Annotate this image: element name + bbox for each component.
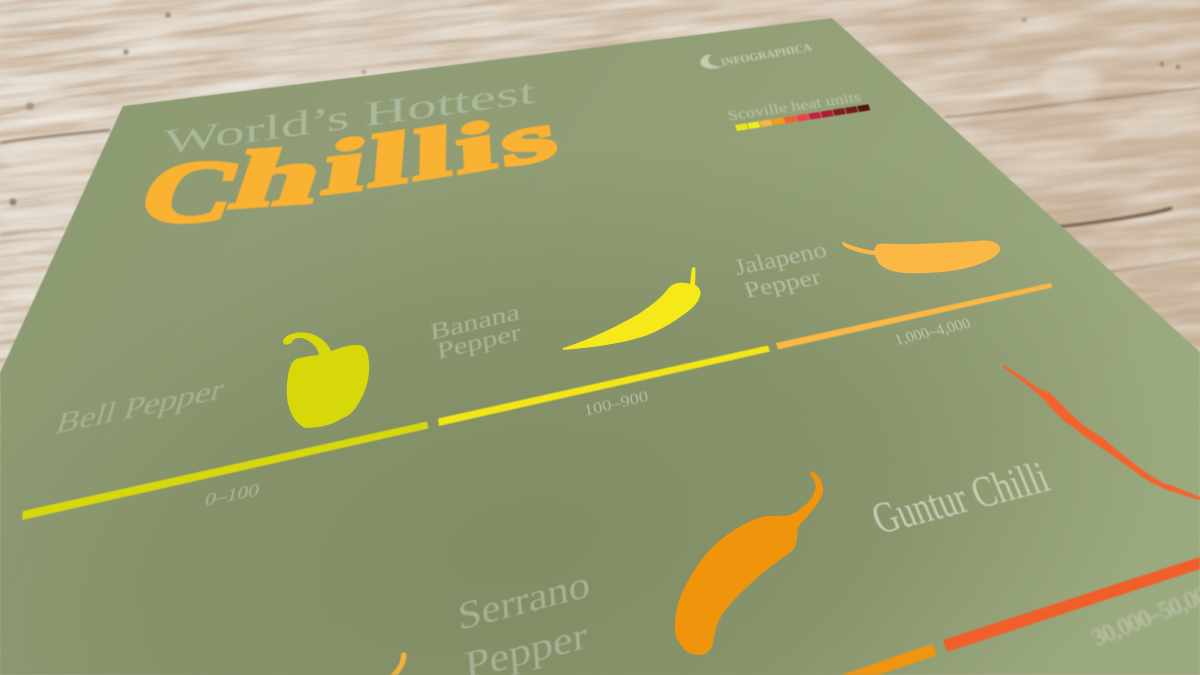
label: Jalapeno Pepper — [731, 237, 830, 303]
label: Banana Pepper: Banana — [429, 298, 521, 345]
label: Jalapeno Pepper: Pepper — [741, 264, 825, 303]
legend: Scoville heat units — [726, 89, 870, 131]
range label: 0–100: 0–100 — [203, 480, 261, 510]
title line: Chillis: s — [498, 93, 563, 183]
label: Banana Pepper: Pepper — [435, 318, 522, 364]
title line: Chillis: i — [454, 105, 501, 190]
label: Serrano Pepper — [460, 580, 589, 675]
item: Bell Pepper — [22, 332, 428, 520]
icon: serrano pepper — [675, 471, 823, 655]
title line: Chillis: i — [318, 120, 369, 214]
label: Banana Pepper — [429, 298, 522, 364]
item: Serrano Pepper — [456, 471, 937, 675]
icon: bell pepper — [283, 332, 369, 428]
title line: Chillis: l — [411, 110, 455, 196]
title — [127, 72, 563, 261]
item: Guntur Chilli — [865, 364, 1200, 652]
range bar: 30,000–50,000 — [943, 557, 1200, 652]
icon: banana pepper — [563, 267, 701, 350]
title line: Chillis: C — [127, 130, 248, 261]
label: Bell Pepper: Bell Pepper — [52, 372, 228, 441]
legend label: Scoville heat units — [726, 89, 863, 124]
label: Serrano Pepper: Serrano — [456, 562, 591, 639]
item: Jalapeno Pepper — [731, 237, 1052, 350]
title line: World's Hottest: World’s Hottest — [164, 72, 536, 162]
range bar: Serrano — [842, 644, 937, 675]
range bar: 0–100 — [22, 422, 428, 520]
icon: partial jalapeno stem at bottom edge — [390, 652, 406, 675]
icon: jalapeno pepper — [842, 240, 1000, 273]
item: Banana Pepper — [429, 267, 770, 426]
title line: Chillis: l — [366, 116, 411, 205]
logo wordmark: INFOGRAPHICA — [719, 41, 813, 69]
range label: 100–900: 100–900 — [582, 388, 650, 420]
label: Jalapeno Pepper: Jalapeno — [731, 237, 830, 280]
icon: guntur chilli — [1003, 364, 1200, 500]
icon: logo crescent — [700, 54, 723, 69]
logo: Infographica — [700, 41, 813, 69]
range bar: 100–900 — [438, 346, 770, 426]
range label: 1,000–4,000: 1,000–4,000 — [892, 315, 973, 349]
title line: Chillis: h — [222, 125, 326, 240]
legend colour swatches — [735, 104, 870, 131]
label: Guntur Chilli: Guntur Chilli — [865, 453, 1056, 544]
range bar: 1,000–4,000 — [776, 283, 1052, 350]
